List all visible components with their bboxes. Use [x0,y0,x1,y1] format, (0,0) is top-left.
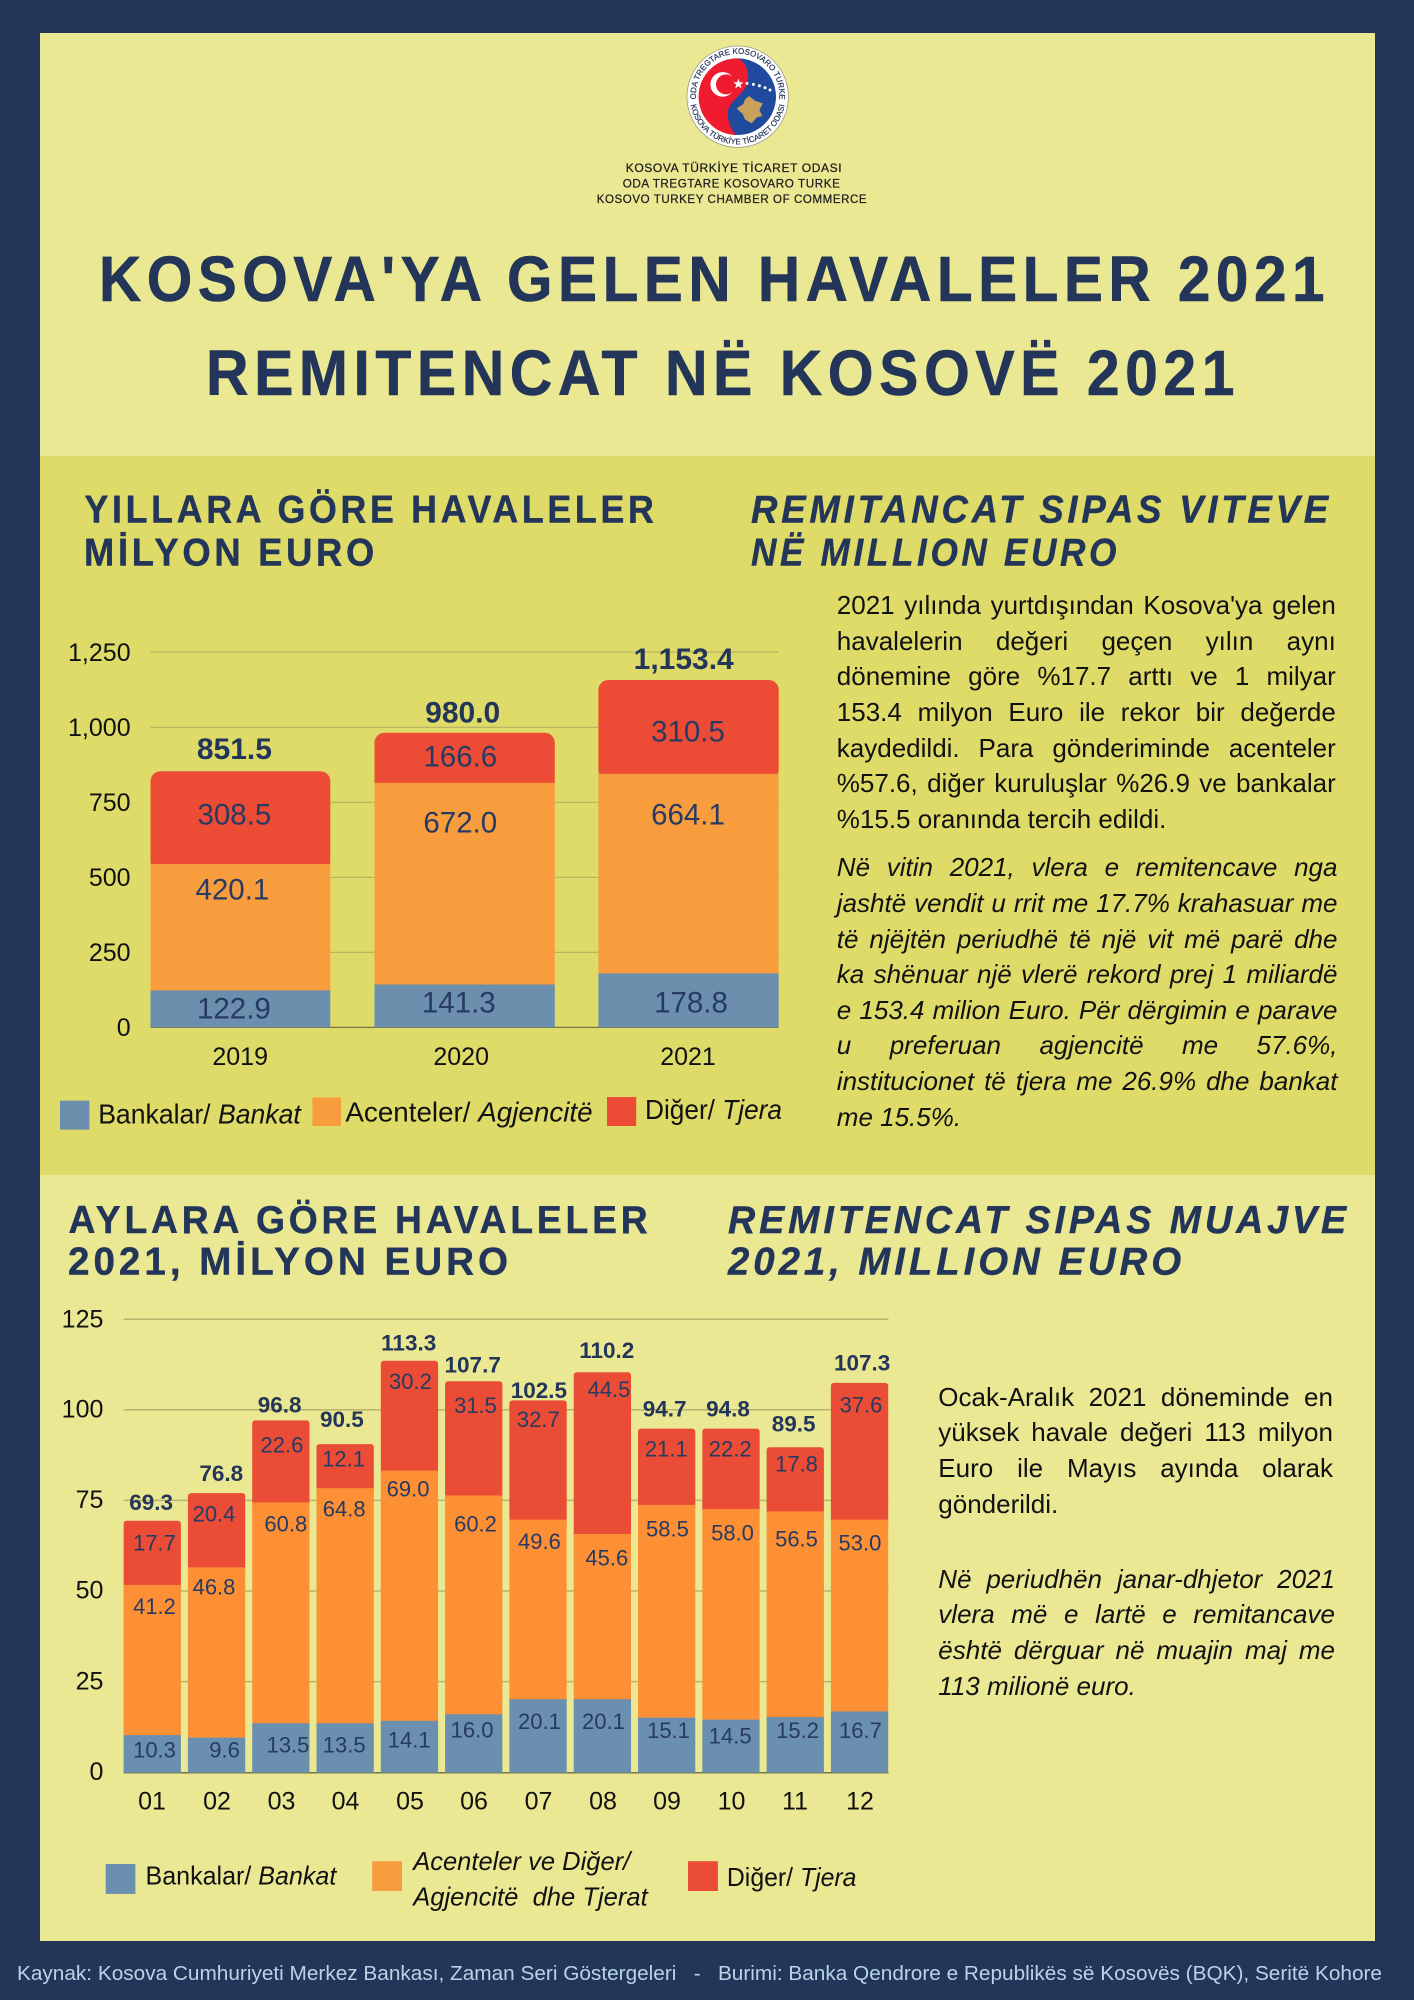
segment values: other: 37.6 [840,1392,882,1418]
heading: yearly remittances Turkish [84,489,658,575]
bar: June [445,1381,502,1773]
text block: yearly summary Albanian: e 153.4 milion Euro. Për dërgimin e parave [837,995,1337,1025]
panel: yearly remittances section background [40,456,1375,1175]
segment values: banks: 15.1 [647,1718,690,1743]
heading: yearly remittances Turkish: MİLYON EURO [84,532,378,575]
x axis labels: 05 [396,1787,424,1815]
x axis labels: 03 [268,1787,295,1815]
title: KOSOVA'YA GELEN HAVALELER 2021 [99,243,1330,315]
segment values: banks [133,1709,882,1762]
legend: monthly chart: Bankalar/ Bankat [146,1860,338,1890]
segment values: other: 22.6 [260,1432,303,1458]
legend: monthly chart: Agjencitë dhe Tjerat [411,1882,649,1912]
text block: monthly summary Turkish: Ocak-Aralık 2021 döneminde en [938,1382,1333,1412]
x axis labels: 09 [653,1787,681,1815]
heading: monthly remittances Albanian: 2021, MILLION EURO [727,1241,1185,1284]
bar: 2019: 851.5 [197,733,272,766]
bar: 2019 [150,733,330,1027]
x axis labels: 08 [589,1787,617,1815]
x axis labels: 01 [138,1787,166,1815]
text block: chamber names: ODA TREGTARE KOSOVARO TURKE [623,177,840,191]
segment values: banks: 14.5 [709,1724,752,1748]
text block: yearly summary Albanian: Në vitin 2021, vlera e remitencave nga [837,852,1337,882]
bar: 2019: 420.1 [195,873,269,906]
text block: yearly summary Turkish [837,590,1336,834]
x axis labels: 10 [718,1787,745,1815]
text block: monthly summary Albanian: është dërguar në muajin maj me [938,1635,1335,1665]
bar: 2021: 664.1 [651,798,725,831]
segment values: other: 22.2 [709,1437,752,1462]
monthly totals: 76.8 [199,1461,243,1486]
footer: data source: Kaynak: Kosova Cumhuriyeti Merkez Bankası, Zaman Seri Göstergeleri - Burimi: Banka Qendrore e Republikës së Kosovës (BQK), Seritë Kohore [17,1963,1382,1985]
heading: yearly remittances Albanian: REMITANCAT SIPAS VITEVE [751,489,1332,532]
monthly totals: 69.3 [129,1490,173,1515]
segment values: banks: 15.2 [776,1718,819,1743]
text block: yearly summary Turkish: kaydedildi. Para gönderiminde acenteler [837,733,1336,763]
segment values: agencies: 64.8 [323,1497,366,1522]
heading: yearly remittances Turkish: YILLARA GÖRE HAVALELER [84,489,658,532]
y axis labels: 1,000 [68,714,131,742]
text block: yearly summary Albanian: jashtë vendit u rrit me 17.7% krahasuar me [837,888,1337,918]
text block: monthly summary Turkish: yüksek havale değeri 113 milyon [938,1417,1333,1447]
y axis labels: 125 [62,1306,103,1334]
bar: 2019: 122.9 [197,992,271,1026]
text block: monthly summary Albanian: vlera më e lartë e remitancave [938,1599,1335,1629]
bar: July [509,1400,567,1773]
bar chart: remittances by year [68,639,779,1071]
text block: monthly summary Albanian: 113 milionë euro. [938,1671,1136,1701]
segment values: other: 32.7 [517,1407,560,1432]
y axis labels: 750 [89,789,131,817]
segment values: banks: 16.0 [451,1717,494,1742]
segment values: other: 30.2 [389,1369,432,1394]
segment values: other [133,1369,882,1555]
text block: monthly summary Albanian [938,1564,1335,1701]
legend: yearly chart: Acenteler/ Agjencitë [345,1097,593,1128]
x axis labels: 12 [846,1787,874,1815]
monthly totals: 94.7 [643,1397,686,1422]
legend: monthly chart [106,1846,856,1912]
y axis labels: 500 [89,864,131,892]
text block: chamber names [597,161,867,206]
segment values: other: 44.5 [588,1377,630,1402]
text block: monthly summary Turkish [938,1382,1333,1519]
text block: yearly summary Turkish: 153.4 milyon Euro ile rekor bir değerde [837,697,1336,727]
segment values: other: 12.1 [322,1446,365,1471]
text block: yearly summary Albanian: u preferuan agjencitë me 57.6%, [837,1030,1337,1060]
text block: yearly summary Albanian: ka shënuar një vlerë rekord prej 1 miliardë [837,959,1337,989]
y axis labels: 100 [62,1396,103,1424]
segment values: banks: 10.3 [133,1737,176,1762]
segment values: banks: 9.6 [209,1737,240,1762]
segment values: agencies: 41.2 [133,1594,176,1619]
monthly totals: 102.5 [511,1378,567,1403]
x axis labels: 2021 [660,1043,716,1071]
bar: February [188,1493,245,1773]
x axis labels: 02 [203,1787,231,1815]
y axis labels: 0 [117,1014,131,1042]
y axis labels: 75 [76,1486,103,1514]
segment values: banks: 13.5 [323,1732,366,1758]
y axis labels [62,1306,103,1786]
text block: monthly summary Turkish: gönderildi. [938,1489,1058,1519]
segment values: other: 17.8 [775,1452,818,1477]
monthly totals: 96.8 [258,1392,301,1418]
segment values: other: 31.5 [454,1393,497,1418]
bar: 2020: 980.0 [425,696,500,730]
text block: yearly summary Turkish: dönemine göre %17.7 arttı ve 1 milyar [837,661,1336,691]
x axis labels: 2019 [212,1043,268,1071]
bar: December [831,1383,888,1773]
bar: March [252,1420,310,1773]
x axis labels: 04 [332,1787,359,1815]
y axis labels: 250 [89,939,131,967]
bar: April [316,1444,374,1773]
heading: monthly remittances Turkish: AYLARA GÖRE HAVALELER [68,1199,652,1242]
legend: yearly chart: Diğer/ Tjera [645,1094,782,1125]
segment values: banks: 16.7 [839,1718,882,1743]
legend: monthly chart: Acenteler ve Diğer/ [411,1846,633,1876]
segment values: other: 17.7 [133,1530,176,1555]
title [99,243,1330,409]
text block: monthly summary Albanian: Në periudhën janar-dhjetor 2021 [938,1564,1335,1594]
bar: 2021: 310.5 [651,715,725,748]
segment values: agencies: 58.0 [711,1521,754,1546]
icon: chamber of commerce logo [686,46,789,148]
text block: monthly summary Turkish: Euro ile Mayıs ayında olarak [938,1453,1333,1483]
heading: yearly remittances Albanian: NË MILLION EURO [751,532,1120,575]
text block: yearly summary Albanian [834,852,1338,1132]
x axis labels: 2020 [433,1043,489,1071]
x axis labels: 07 [525,1787,552,1815]
bar: 2019: 308.5 [197,798,271,831]
segment values: agencies: 53.0 [838,1530,881,1555]
bar: 2021: 1,153.4 [634,643,734,676]
segment values: agencies: 49.6 [518,1529,561,1554]
x axis labels: 06 [460,1787,488,1815]
monthly totals: 94.8 [706,1397,750,1422]
y axis labels: 1,250 [68,639,131,667]
x axis labels [212,1043,716,1071]
legend: monthly chart: Diğer/ Tjera [727,1862,856,1892]
segment values: other: 21.1 [645,1437,688,1462]
bar: 2020: 141.3 [422,987,496,1020]
segment values: agencies: 69.0 [387,1477,430,1502]
y axis labels: 25 [76,1668,103,1696]
legend: yearly chart: Bankalar/ Bankat [98,1098,302,1129]
heading: monthly remittances Albanian [727,1199,1350,1284]
segment values: agencies: 60.8 [264,1511,307,1536]
text block: yearly summary Turkish: havalelerin değeri geçen yılın aynı [837,626,1336,656]
text block: yearly summary Turkish: %15.5 oranında tercih edildi. [837,804,1166,834]
bar: 2021 [598,643,779,1027]
bar: September [638,1429,695,1773]
y axis labels [68,639,131,1042]
text block: yearly summary Albanian: institucionet të tjera me 26.9% dhe bankat [837,1066,1337,1096]
segment values: agencies: 58.5 [646,1517,689,1542]
segment values: other: 20.4 [193,1502,235,1526]
monthly totals: 107.3 [834,1350,890,1375]
bar: 2020: 672.0 [423,806,497,839]
monthly totals: 89.5 [772,1411,815,1436]
bar: 2020: 166.6 [423,740,497,773]
icon: chamber of commerce logo: KOSOVA TÜRKİYE TİCARET ODASI [690,104,785,144]
x axis labels: 11 [782,1787,808,1815]
bar: 2021: 178.8 [654,987,728,1020]
segment values: agencies: 46.8 [193,1574,235,1600]
heading: monthly remittances Turkish: 2021, MİLYON EURO [68,1241,512,1284]
icon: chamber of commerce logo: ODA TREGTARE KOSOVARO TURKE [690,48,786,100]
segment values: banks: 20.1 [518,1709,561,1734]
heading: monthly remittances Turkish [68,1199,652,1284]
text block: yearly summary Turkish: %57.6, diğer kuruluşlar %26.9 ve bankalar [837,768,1336,798]
text block: yearly summary Turkish: 2021 yılında yurtdışından Kosova'ya gelen [837,590,1336,620]
text block: chamber names: KOSOVO TURKEY CHAMBER OF COMMERCE [597,192,867,206]
segment values: agencies: 56.5 [775,1526,818,1551]
title: REMITENCAT NË KOSOVË 2021 [206,337,1240,409]
monthly totals: 110.2 [579,1338,634,1363]
segment values: agencies: 45.6 [585,1546,628,1571]
x axis labels [138,1787,874,1815]
y axis labels: 0 [89,1758,103,1786]
y axis labels: 50 [76,1576,103,1604]
bar: May [381,1361,438,1773]
monthly totals: 107.7 [445,1352,501,1378]
monthly totals: 90.5 [320,1407,364,1432]
text block: chamber names: KOSOVA TÜRKİYE TİCARET ODASI [626,161,842,175]
segment values: agencies: 60.2 [454,1512,497,1537]
bar: August [574,1372,631,1773]
legend: yearly chart [60,1094,782,1130]
heading: monthly remittances Albanian: REMITENCAT SIPAS MUAJVE [728,1199,1350,1242]
text block: yearly summary Albanian: të njëjtën periudhë të një vit më parë dhe [837,924,1337,954]
bar: January [124,1521,181,1773]
monthly totals: 113.3 [381,1330,436,1356]
text block: yearly summary Albanian: me 15.5%. [837,1102,961,1132]
segment values: banks: 13.5 [267,1732,309,1758]
monthly totals [129,1330,890,1515]
bar: November [767,1447,824,1773]
heading: yearly remittances Albanian [751,489,1332,575]
bar: October [702,1429,760,1773]
segment values: banks: 20.1 [582,1709,625,1734]
segment values: banks: 14.1 [388,1728,431,1753]
segment values: agencies [133,1477,881,1619]
bar chart: remittances by month [62,1306,890,1815]
bar: 2020 [374,696,555,1027]
